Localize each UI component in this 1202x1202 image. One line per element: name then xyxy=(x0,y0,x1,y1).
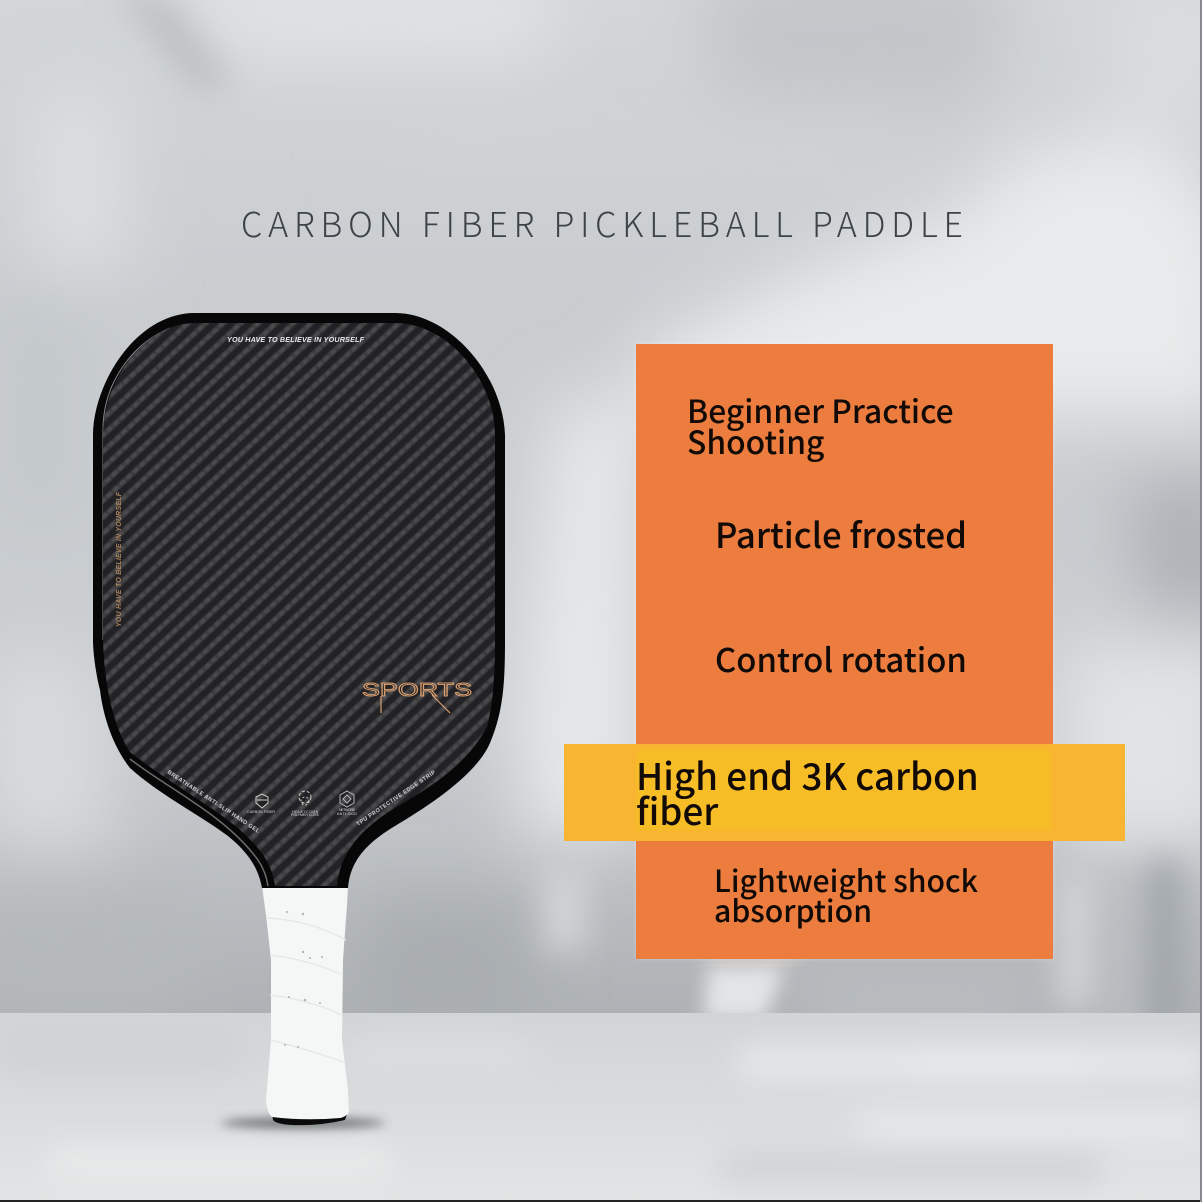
icon: honeycomb badge: POLYMER CORE xyxy=(291,813,320,817)
grip butt cap xyxy=(272,1114,347,1125)
feature: high end 3K carbon fiber: fiber xyxy=(636,782,718,836)
paddle slogan top: YOU HAVE TO BELIEVE IN YOURSELF xyxy=(227,335,365,344)
carbon fibre face xyxy=(103,323,495,886)
paddle left edge text: BREATHABLE ANTI-SLIP HAND GEL xyxy=(166,770,261,835)
white wrapped grip xyxy=(262,886,349,1119)
pickleball paddle xyxy=(93,313,505,1135)
icon: network badge: NETWORK xyxy=(339,808,356,812)
paddle right edge text: TPU PROTECTIVE EDGE STRIP xyxy=(356,770,437,828)
icon: carbon fiber badge: CARBON FIBER xyxy=(247,810,275,814)
feature: lightweight shock absorption: Lightweight shock xyxy=(714,857,978,901)
feature: lightweight shock absorption xyxy=(714,857,978,931)
feature: particle frosted: Particle frosted xyxy=(715,508,967,558)
icon: network badge: ANTI-SKID xyxy=(337,812,357,816)
highlight band: high end 3K carbon fiber xyxy=(564,744,1125,841)
feature: beginner practice shooting xyxy=(687,387,954,464)
feature: beginner practice shooting: Shooting xyxy=(687,418,824,464)
title: CARBON FIBER PICKLEBALL PADDLE xyxy=(241,198,963,247)
handle shadow xyxy=(221,1118,385,1128)
icon: carbon fiber badge xyxy=(247,794,275,814)
panel: orange feature panel xyxy=(636,344,1053,959)
feature: lightweight shock absorption: absorption xyxy=(714,887,872,931)
icon: honeycomb badge xyxy=(291,791,320,817)
band inner highlight xyxy=(637,750,1051,830)
sports logo: SPORTS xyxy=(362,680,472,700)
neck edge strip xyxy=(130,759,268,886)
feature: beginner practice shooting: Beginner Practice xyxy=(687,387,954,433)
paddle frame highlight xyxy=(103,328,170,640)
sports logo xyxy=(362,680,472,713)
paddle frame xyxy=(93,313,505,888)
feature: high end 3K carbon fiber xyxy=(636,747,979,836)
paddle slogan side: YOU HAVE TO BELIEVE IN YOURSELF xyxy=(116,491,123,627)
icon: honeycomb badge: HONEYCOMB xyxy=(292,810,319,814)
feature: high end 3K carbon fiber: High end 3K carbon xyxy=(636,747,979,801)
icon: network badge xyxy=(337,791,357,816)
feature: control rotation: Control rotation xyxy=(715,635,967,682)
